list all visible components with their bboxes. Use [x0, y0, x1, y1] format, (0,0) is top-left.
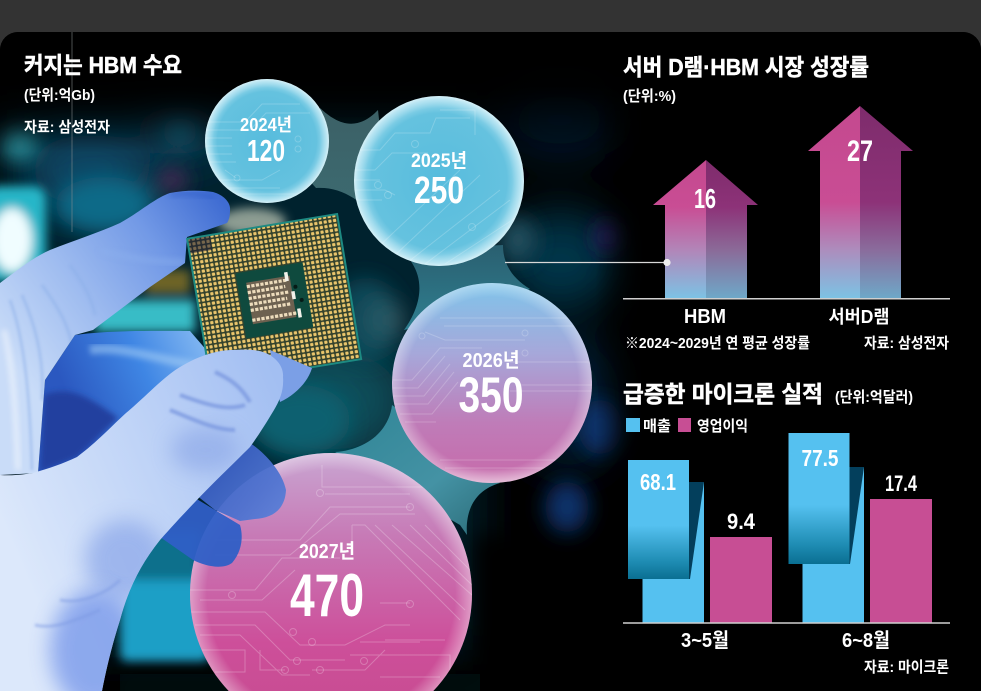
finger band behind chip: [38, 331, 215, 475]
bubble: 2026: [392, 283, 592, 483]
index finger: [0, 191, 230, 475]
chip die area: [235, 262, 313, 339]
heading: Micron results: 급증한 마이크론 실적: [623, 381, 823, 407]
connector line: [505, 259, 671, 266]
label: 2024: 2024년: [240, 115, 292, 135]
bar: profit Jun-Aug: 17.4: [885, 471, 918, 496]
bubble: 2024: [205, 79, 329, 203]
connecting blob 2024 to 2025: [312, 108, 380, 200]
arrow: HBM: 16: [694, 183, 716, 214]
label: 2027: 2027년: [299, 540, 355, 563]
bar: revenue Jun-Aug: 77.5: [802, 445, 839, 471]
glove palm and thumb: [0, 350, 283, 691]
axis label: server DRAM: 서버D램: [828, 307, 890, 327]
legend: 매출: [643, 418, 671, 435]
source note: 자료: 삼성전자: [24, 119, 110, 136]
bar: profit Jun-Aug: [870, 471, 932, 622]
blurred background photo: [0, 80, 622, 662]
arrow: server DRAM: [808, 106, 913, 298]
axis label: HBM: HBM: [684, 306, 726, 328]
bottom shade: [120, 535, 497, 691]
connecting blob 2026 to 2027: [335, 405, 500, 535]
bar: revenue Mar-May: 68.1: [640, 469, 676, 495]
bar: revenue Mar-May: [628, 460, 704, 622]
unit note: (단위:%): [623, 88, 676, 105]
value: 120: 120: [247, 133, 285, 168]
bubble: 2027: [190, 453, 472, 691]
label: 2026: 2026년: [462, 349, 520, 372]
bar: profit Mar-May: [710, 509, 772, 622]
bubble: 2025: [354, 96, 524, 266]
axis label: Mar-May: 3~5월: [681, 629, 729, 652]
bar: profit Mar-May: 9.4: [727, 509, 756, 534]
source note: 자료: 마이크론: [864, 659, 949, 676]
unit note: (단위:억달러): [835, 389, 913, 406]
small knuckle behind thumb: [270, 350, 312, 402]
unit note: (단위:억Gb): [24, 87, 95, 104]
heading: HBM demand: 커지는 HBM 수요: [24, 52, 182, 78]
distant blue light: [545, 481, 589, 533]
source note: 자료: 삼성전자: [864, 335, 949, 352]
legend: 영업이익: [697, 418, 748, 435]
panel: Micron results chart: [623, 381, 950, 676]
connecting blob 2025 to 2026: [404, 245, 530, 330]
finger: middle: [196, 441, 286, 521]
finger: ring: [160, 498, 242, 567]
top bar: [0, 0, 981, 32]
legend: [626, 418, 748, 435]
thin vertical line: [72, 32, 73, 232]
right panel backing: [599, 32, 981, 462]
arrow: server DRAM: 27: [847, 135, 873, 168]
value: 250: 250: [414, 170, 464, 212]
axis label: Jun-Aug: 6~8월: [842, 629, 890, 652]
bar: revenue Jun-Aug: [788, 433, 864, 622]
value: 350: 350: [458, 367, 524, 423]
value: 470: 470: [290, 562, 364, 629]
heading: HBM demand: [24, 52, 182, 136]
top shade: [0, 32, 640, 152]
heading: growth rate: 서버 D램·HBM 시장 성장률: [623, 54, 869, 80]
arrow: HBM: [653, 160, 758, 298]
lower fingers: [160, 441, 286, 567]
microchip: [186, 213, 362, 385]
footnote: ※2024~2029년 연 평균 성장률: [625, 335, 810, 352]
panel: growth rate chart: [623, 54, 950, 352]
label: 2025: 2025년: [411, 150, 467, 172]
